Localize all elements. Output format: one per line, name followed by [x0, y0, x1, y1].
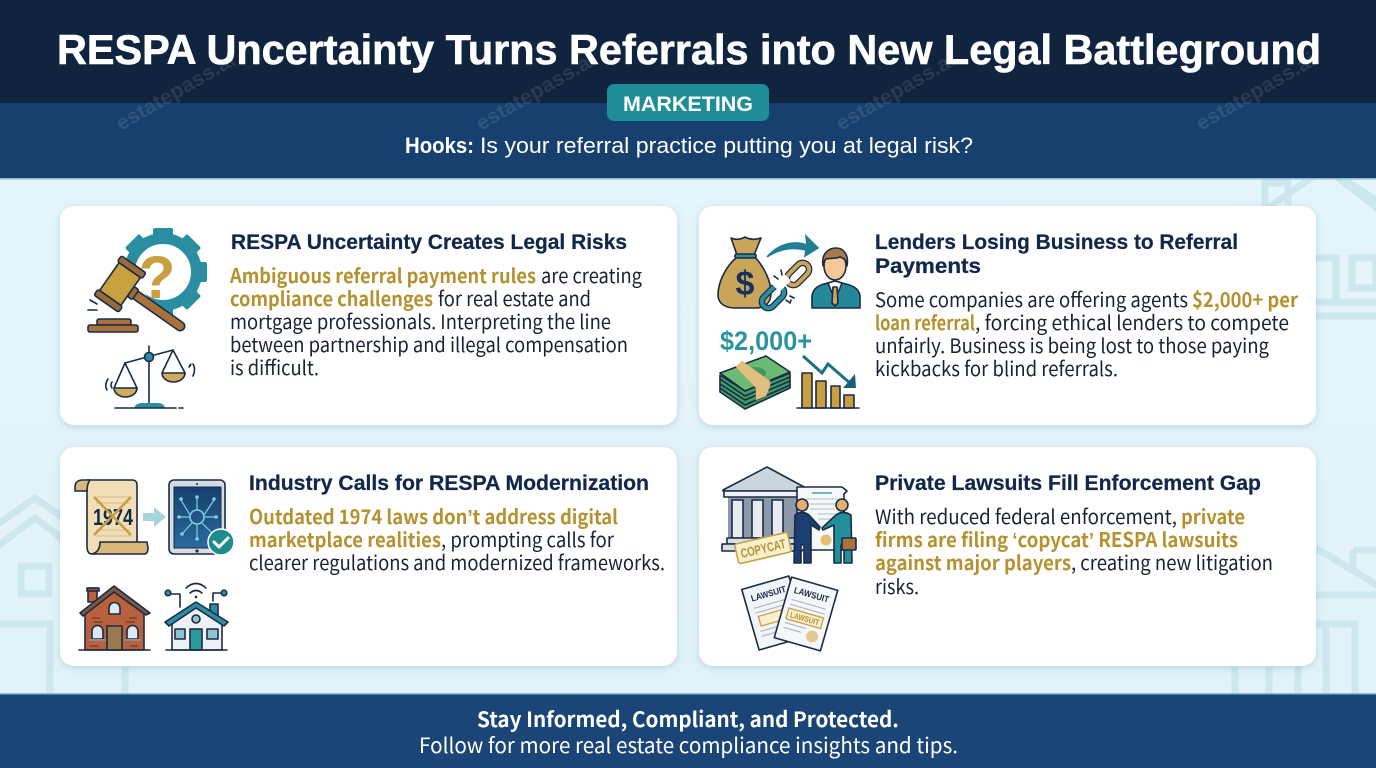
watermarks: estatepass.ai — [1192, 48, 1320, 135]
hook line: Hooks: — [405, 133, 474, 158]
panel: private lawsuits — [699, 447, 1316, 666]
icon: outdated 1974 scroll: 1974 — [93, 504, 133, 530]
heading: Payments — [875, 254, 981, 278]
icon: courthouse — [722, 467, 806, 551]
body text: risks. — [875, 571, 919, 600]
icon: copycat stamp: COPYCAT — [739, 536, 787, 561]
background — [0, 178, 1376, 694]
body text: mortgage professionals. Interpreting the line — [230, 306, 611, 335]
body text: are creating — [541, 260, 642, 289]
icon: lawsuit documents: LAWSUIT — [789, 610, 820, 627]
body text: marketplace realities — [249, 524, 441, 553]
body text: private — [1181, 501, 1245, 530]
body text: between partnership and illegal compensation — [230, 329, 628, 358]
heading: Private Lawsuits Fill Enforcement Gap — [875, 471, 1261, 495]
footer — [0, 693, 1376, 768]
body text: kickbacks for blind referrals. — [875, 353, 1118, 382]
icon: handshake — [794, 499, 856, 563]
icon: traditional brick house — [79, 586, 150, 650]
body text: , prompting calls for — [441, 524, 614, 553]
body text: against major players — [875, 547, 1071, 576]
body text: Ambiguous referral payment rules — [229, 260, 536, 289]
heading — [875, 230, 1238, 278]
body text: Outdated 1974 laws don’t address digital — [249, 501, 618, 530]
watermarks: estatepass.ai — [832, 48, 960, 135]
icon label: $2,000+: $2,000+ — [720, 326, 812, 356]
background house pattern — [0, 168, 1376, 694]
panel: lenders losing business — [699, 206, 1316, 425]
body text: clearer regulations and modernized frameworks. — [249, 547, 665, 576]
body text: , creating new litigation — [1071, 547, 1273, 576]
category badge: MARKETING — [623, 93, 753, 116]
watermarks — [112, 48, 1320, 135]
body text: With reduced federal enforcement, — [875, 501, 1177, 530]
icon: gavel and gear: ? — [139, 244, 175, 311]
icon: outdated 1974 scroll — [75, 480, 148, 554]
icon: digital tablet — [169, 480, 234, 555]
icon: money bag — [718, 237, 771, 308]
footer headline: Stay Informed, Compliant, and Protected. — [477, 704, 899, 734]
icon: balance scale — [106, 346, 194, 408]
watermarks: estatepass.ai — [112, 48, 240, 135]
icon: lawsuit documents — [742, 576, 838, 651]
body text — [229, 260, 642, 381]
hook line: Is your referral practice putting you at legal risk? — [480, 133, 973, 158]
icon: lawsuit documents: LAWSUIT — [793, 585, 831, 605]
panel: RESPA uncertainty — [60, 206, 677, 425]
icon: broken chain — [759, 260, 812, 311]
panel: RESPA modernization — [60, 447, 677, 666]
body text: compliance challenges — [230, 283, 433, 312]
icon: agreement document — [797, 487, 847, 550]
body text — [875, 284, 1298, 382]
icon: falling bar chart — [797, 356, 859, 408]
header band — [0, 0, 1376, 180]
body text: loan referral — [875, 307, 975, 336]
footer call to action: Follow for more real estate compliance insights and tips. — [419, 730, 958, 760]
body text: for real estate and — [438, 283, 591, 312]
body text: unfairly. Business is being lost to those paying — [875, 330, 1269, 359]
arrow — [143, 507, 166, 527]
watermarks: estatepass.ai — [472, 48, 600, 135]
heading: RESPA Uncertainty Creates Legal Risks — [231, 230, 627, 254]
body text — [249, 501, 665, 576]
icon: smart house — [165, 584, 228, 650]
body text — [875, 501, 1273, 600]
category badge — [607, 84, 769, 121]
body text: is difficult. — [230, 352, 319, 381]
icon: gavel and gear — [88, 228, 207, 348]
body text: , forcing ethical lenders to compete — [975, 307, 1289, 336]
heading: Industry Calls for RESPA Modernization — [249, 471, 649, 495]
icon: money bag: $ — [736, 265, 755, 303]
icon: cash stack — [720, 356, 790, 409]
heading: Lenders Losing Business to Referral — [875, 230, 1238, 254]
icon: lawsuit documents: LAWSUIT — [750, 584, 788, 604]
body text: firms are filing ‘copycat’ RESPA lawsuits — [875, 524, 1238, 553]
icon: agent — [812, 248, 860, 308]
body text: $2,000+ per — [1192, 284, 1298, 313]
icon: arrow to agent — [767, 236, 818, 257]
body text: Some companies are offering agents — [875, 284, 1188, 313]
title: RESPA Uncertainty Turns Referrals into New Legal Battleground — [57, 26, 1321, 73]
